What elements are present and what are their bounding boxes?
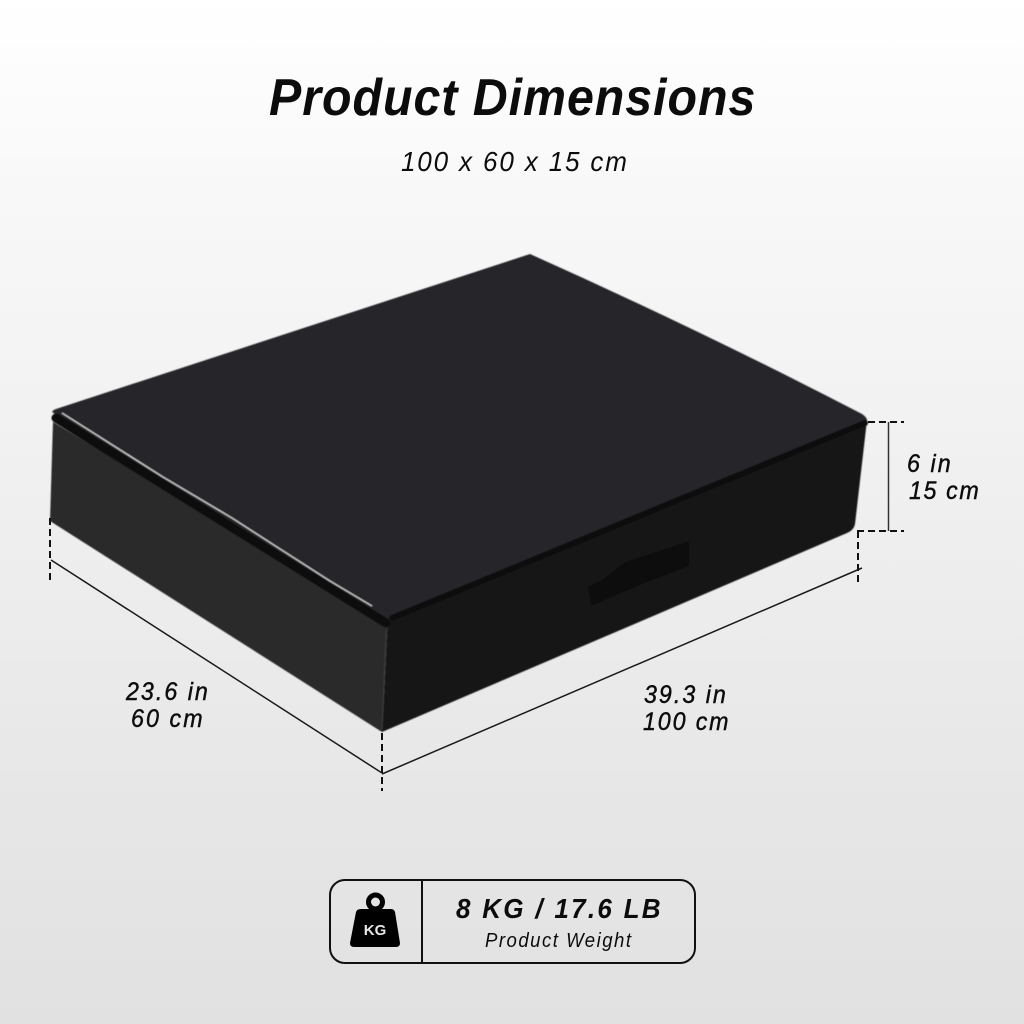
carry handle xyxy=(588,541,689,606)
weight value: 8 KG / 17.6 LB xyxy=(456,893,661,924)
height dimension: 6 in / 15 cm: 15 cm xyxy=(909,477,979,505)
depth dimension: 23.6 in / 60 cm: 23.6 in xyxy=(125,678,208,706)
weight panel xyxy=(330,880,695,963)
depth dimension: 23.6 in / 60 cm: 60 cm xyxy=(131,705,203,733)
depth dimension: 23.6 in / 60 cm xyxy=(50,518,382,791)
product: black mat xyxy=(50,254,867,732)
left seam xyxy=(56,418,386,623)
seam highlight xyxy=(62,413,372,606)
left side face xyxy=(50,422,388,732)
right seam xyxy=(392,423,865,618)
subtitle: overall dimensions: 100 x 60 x 15 cm xyxy=(401,146,627,177)
height dimension: 6 in / 15 cm xyxy=(857,422,979,531)
title: Product Dimensions xyxy=(269,68,755,126)
right side face xyxy=(382,420,867,732)
width dimension: 39.3 in / 100 cm: 100 cm xyxy=(643,708,729,736)
height dimension: 6 in / 15 cm: 6 in xyxy=(907,450,951,478)
top face xyxy=(52,254,867,622)
icon: kettle weight xyxy=(350,895,400,947)
width dimension: 39.3 in / 100 cm: 39.3 in xyxy=(644,681,726,709)
width dimension: 39.3 in / 100 cm xyxy=(382,531,862,774)
front corner crease xyxy=(382,630,386,730)
icon: kettle weight: KG xyxy=(364,922,386,939)
weight caption: Product Weight xyxy=(485,930,633,952)
